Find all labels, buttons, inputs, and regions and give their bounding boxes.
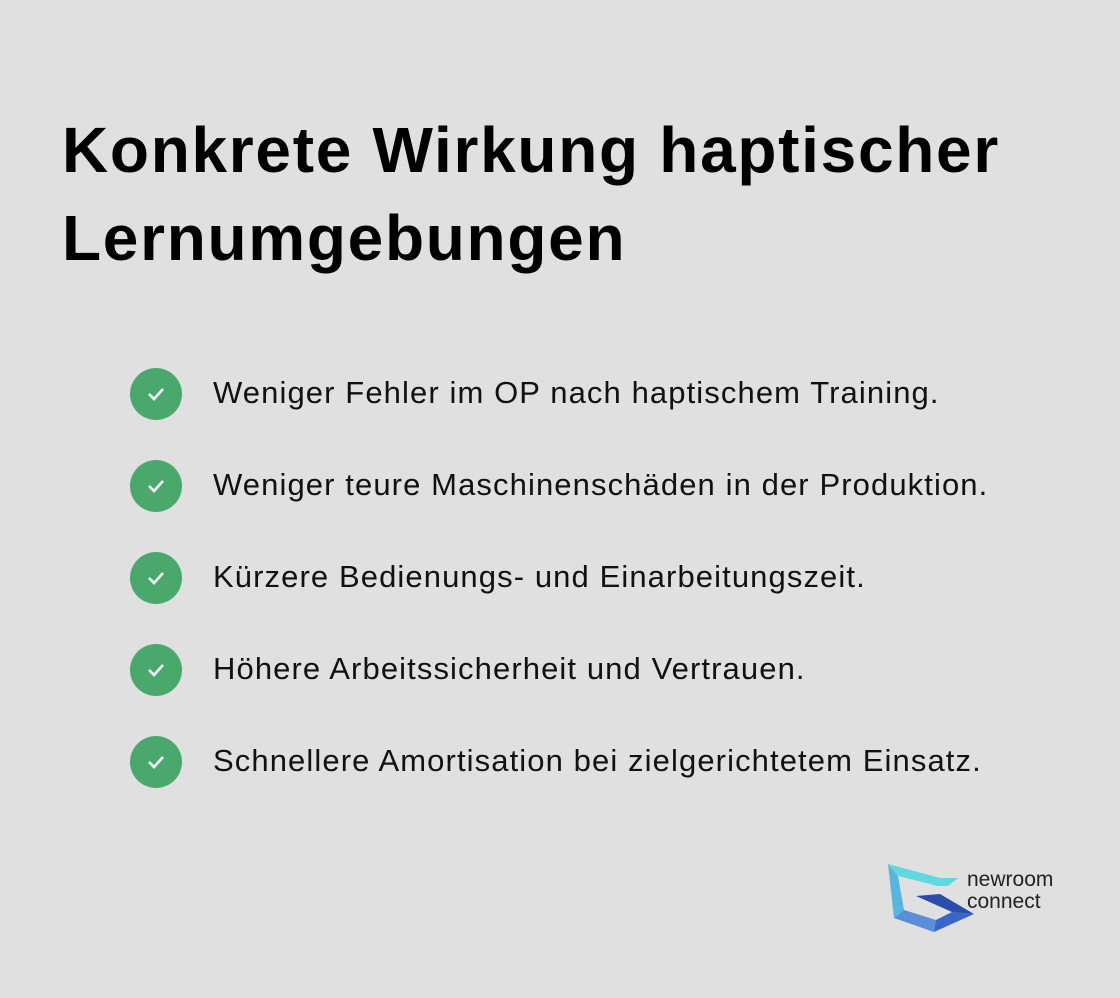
logo: newroom xyxy=(967,868,1053,891)
logo: connect xyxy=(967,890,1041,913)
item 3 xyxy=(130,552,866,604)
item 4 xyxy=(130,644,806,696)
title: Konkrete Wirkung haptischer xyxy=(62,114,1000,186)
title xyxy=(62,114,1000,274)
item 1 xyxy=(130,368,940,420)
logo xyxy=(888,864,1053,932)
item 1: Weniger Fehler im OP nach haptischem Training. xyxy=(213,375,940,410)
item 4: Höhere Arbeitssicherheit und Vertrauen. xyxy=(213,651,806,686)
title: Lernumgebungen xyxy=(62,202,626,274)
item 5 xyxy=(130,736,982,788)
item 3: Kürzere Bedienungs- und Einarbeitungszeit. xyxy=(213,559,866,594)
item 2 xyxy=(130,460,988,512)
item 2: Weniger teure Maschinenschäden in der Produktion. xyxy=(213,467,988,502)
item 5: Schnellere Amortisation bei zielgerichtetem Einsatz. xyxy=(213,743,982,778)
